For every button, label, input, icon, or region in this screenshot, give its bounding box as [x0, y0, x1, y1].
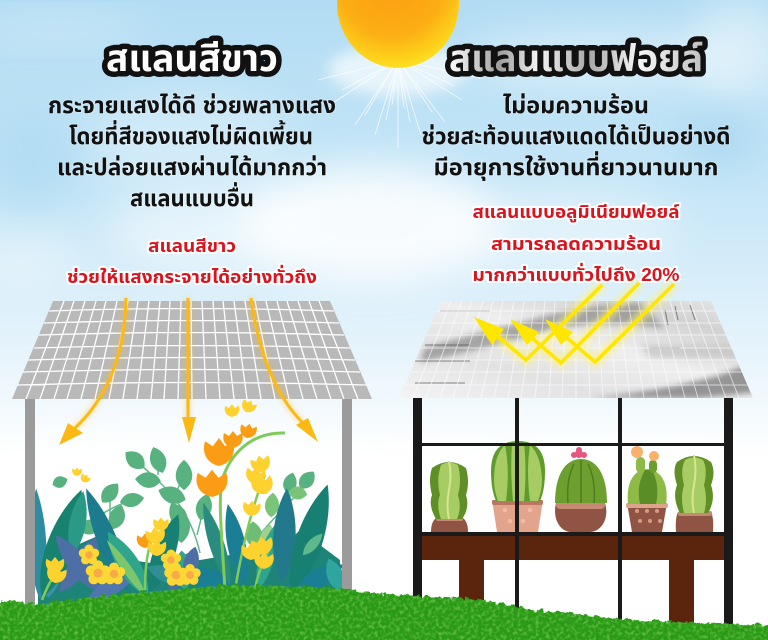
round yellow flowers	[79, 544, 201, 586]
callout: foil net: มากกว่าแบบทั่วไปถึง 20%	[472, 263, 680, 285]
background fronds	[104, 467, 304, 554]
callout: foil net: สแลนแบบอลูมิเนียมฟอยล์	[472, 202, 680, 223]
dense leaf mass at base	[38, 530, 340, 610]
cactus 2	[491, 441, 545, 532]
plants and flowers	[28, 397, 350, 610]
text block: foil net benefits: มีอายุการใช้งานที่ยาวนานมาก	[434, 151, 718, 181]
callout: white net: ช่วยให้แสงกระจายได้อย่างทั่วถึง	[67, 265, 317, 287]
text block: white net benefits	[48, 92, 336, 211]
callout: white net	[67, 236, 317, 287]
cactus 4	[626, 446, 668, 532]
left post	[25, 399, 35, 605]
text block: foil net benefits: ช่วยสะท้อนแสงแดดได้เป็นอย่างดี	[422, 123, 730, 149]
text block: white net benefits: สแลนแบบอื่น	[130, 182, 254, 211]
left house: white net structure	[12, 301, 372, 605]
arrows: diffused light through white net	[59, 298, 318, 445]
heading: foil shade net: สแลนแบบฟอยล์	[449, 38, 703, 79]
right post	[342, 399, 352, 594]
text block: white net benefits: โดยที่สีของแสงไม่ผิดเพี้ยน	[69, 120, 313, 149]
arrows: reflected sunlight off foil	[474, 283, 674, 363]
white net roof	[12, 301, 372, 399]
large leaves	[35, 484, 342, 600]
callout: white net: สแลนสีขาว	[148, 236, 236, 256]
flower stems	[42, 433, 285, 600]
text block: white net benefits: และปล่อยแสงผ่านได้มากกว่า	[57, 154, 327, 180]
black frame	[413, 398, 733, 624]
cactus 5	[674, 455, 714, 532]
callout: foil net	[472, 202, 680, 285]
text block: foil net benefits	[422, 92, 730, 181]
pink flower	[571, 447, 587, 458]
foil net roof	[399, 300, 760, 398]
orange flowers	[631, 446, 659, 461]
grass hill	[0, 580, 768, 640]
cacti on shelf	[430, 441, 714, 532]
orange blossoms	[137, 422, 258, 548]
callout: foil net: สามารถลดความร้อน	[491, 234, 661, 254]
text block: foil net benefits: ไม่อมความร้อน	[503, 92, 649, 118]
cactus 1	[430, 461, 468, 532]
cactus 3	[555, 447, 607, 532]
right house: foil net structure	[399, 300, 760, 624]
text block: white net benefits: กระจายแสงได้ดี ช่วยพลางแสง	[48, 92, 336, 118]
sun with rays	[318, 0, 480, 148]
wooden bench	[422, 536, 724, 623]
heading: white shade net: สแลนสีขาว	[106, 38, 278, 79]
yellow blossoms and hearts	[45, 397, 276, 585]
